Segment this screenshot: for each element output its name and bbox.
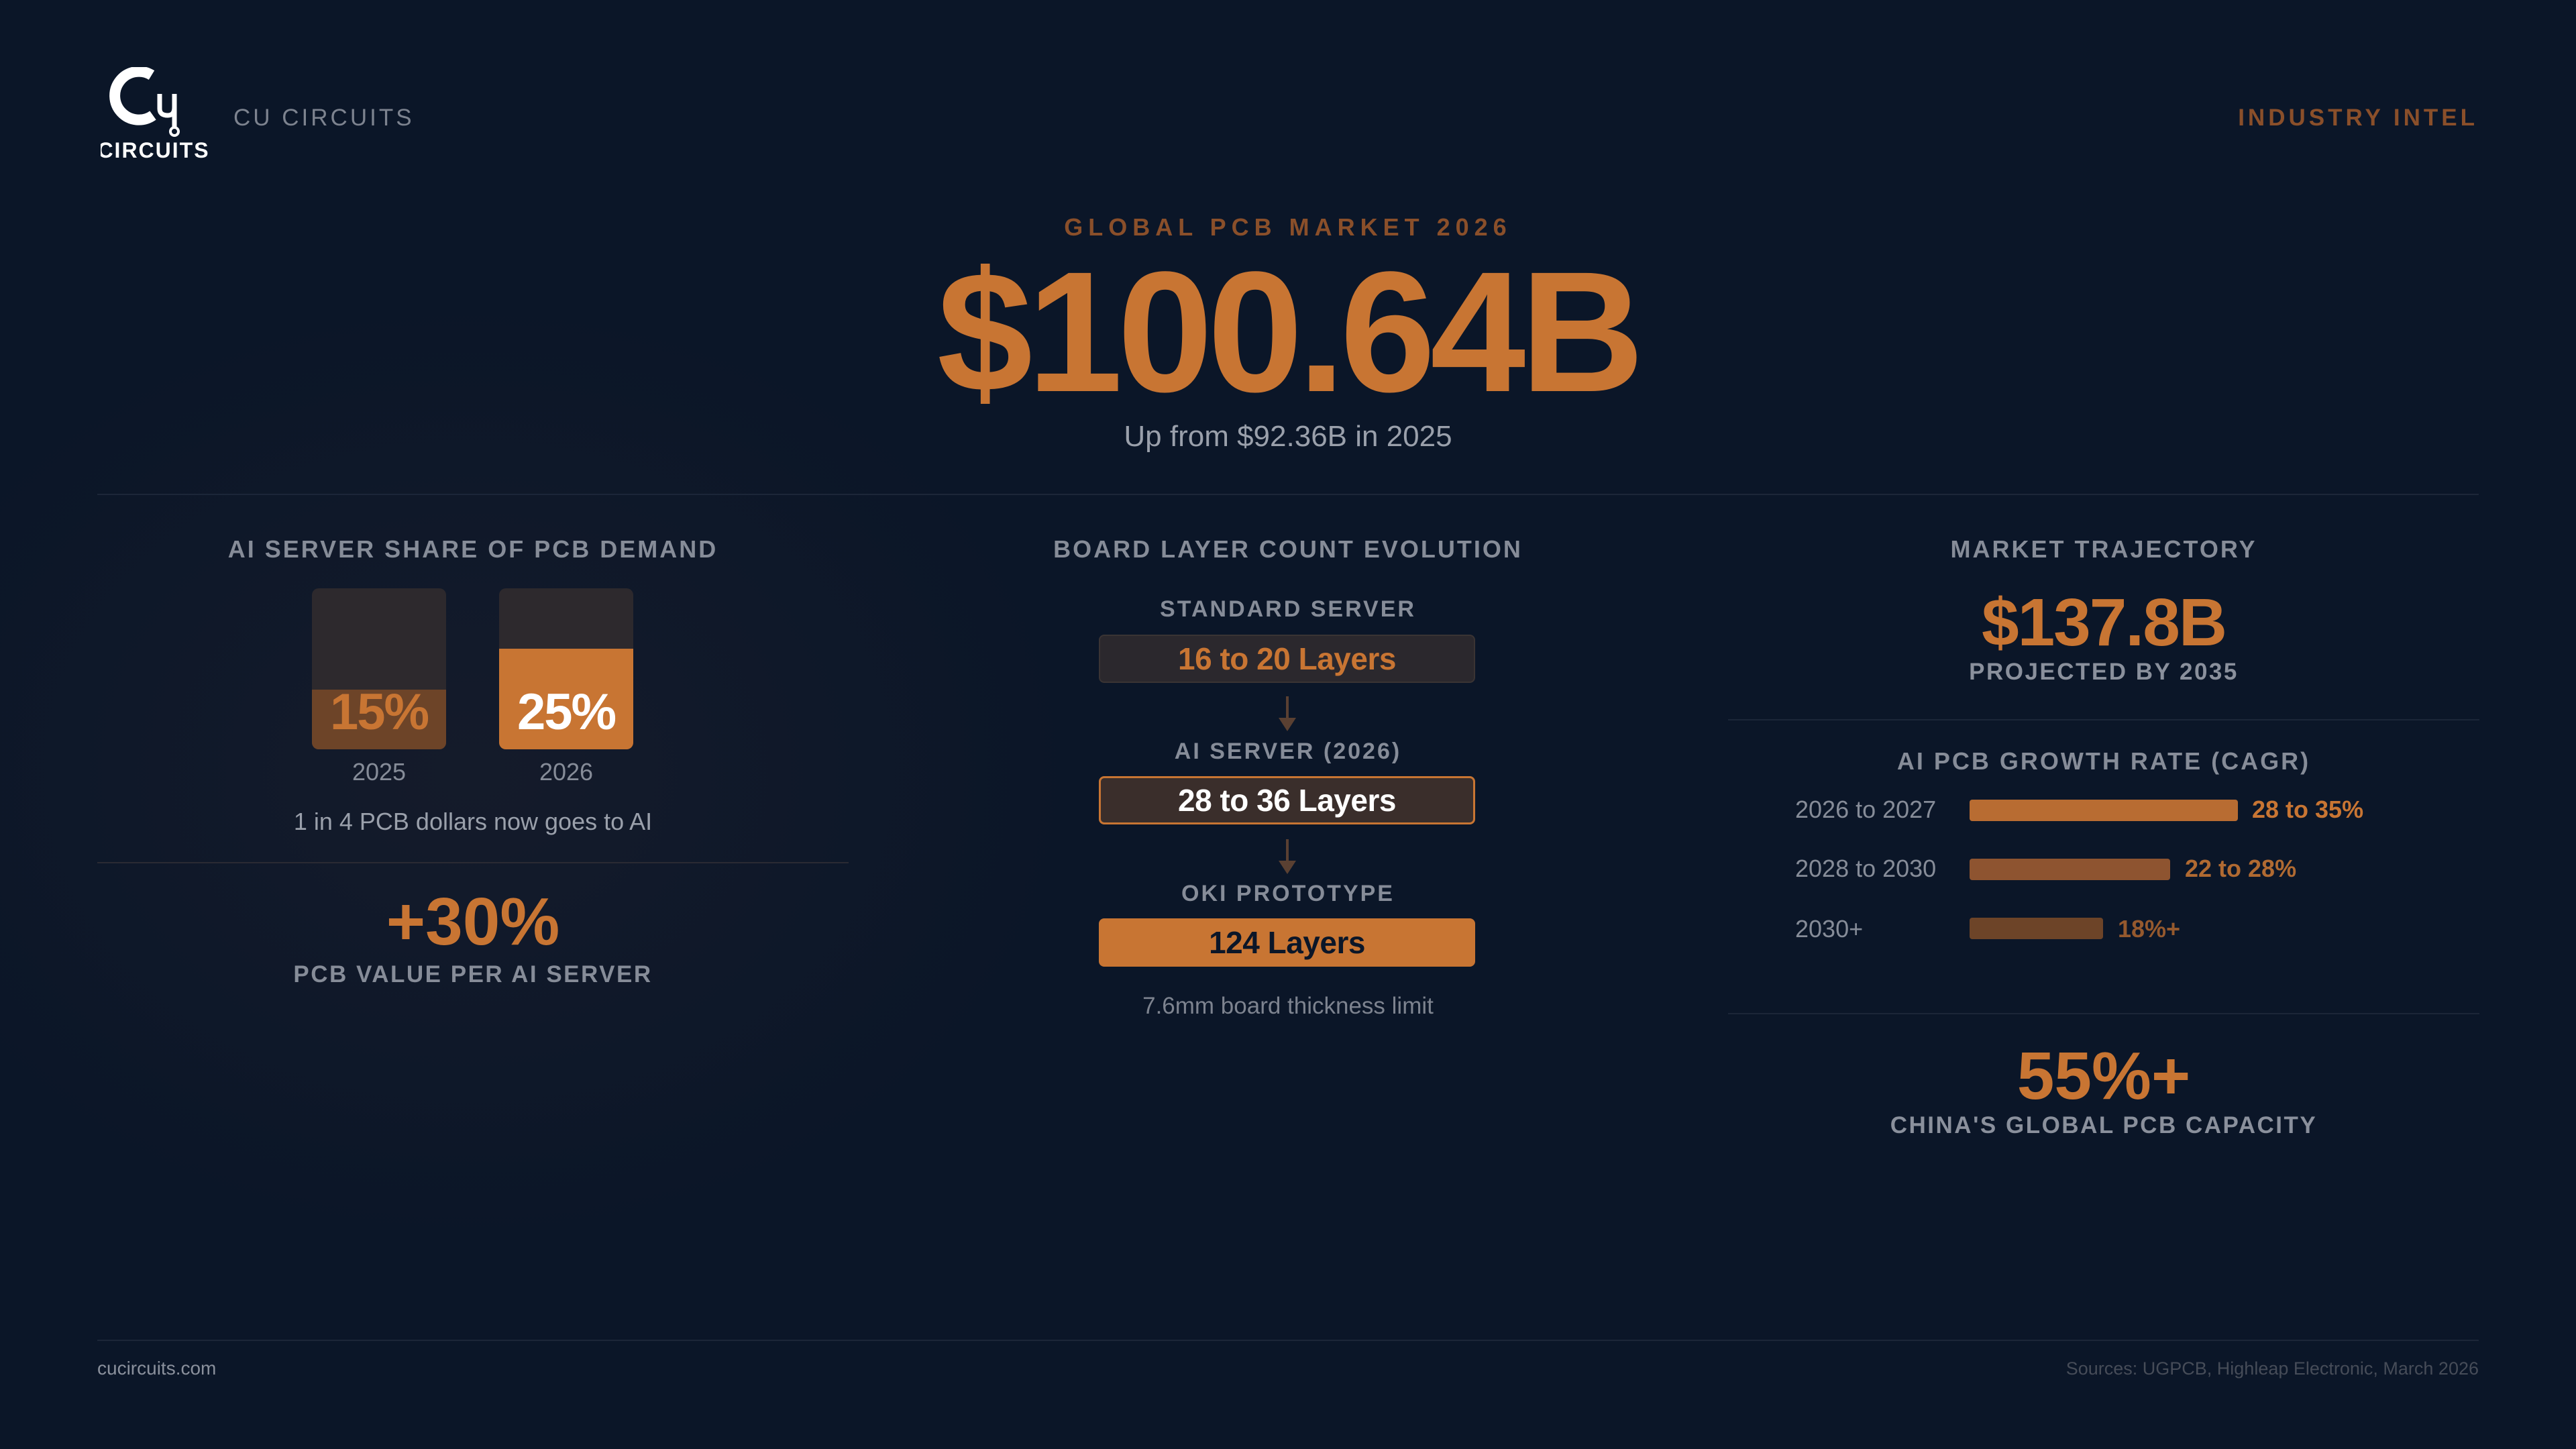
panel: AI server share <box>97 535 849 987</box>
bar chart: 22 to 28% <box>2185 855 2296 882</box>
text: 28 to 36 Layers <box>1178 783 1396 818</box>
panel: AI server share: PCB VALUE PER AI SERVER <box>293 961 653 987</box>
bar chart: 2028 to 2030 <box>1795 855 1936 882</box>
cagr heading: AI PCB GROWTH RATE (CAGR) <box>1897 747 2310 775</box>
panel: layer count: BOARD LAYER COUNT EVOLUTION <box>1053 535 1523 563</box>
caption: 1 in 4 PCB dollars now goes to AI <box>294 808 652 835</box>
arrow 2 <box>1279 839 1296 874</box>
bar 2026 <box>499 588 633 749</box>
stat +30%: +30% <box>386 884 559 959</box>
footer sources: Sources: UGPCB, Highleap Electronic, March 2026 <box>2066 1358 2479 1379</box>
china stat: 55%+ <box>2017 1038 2190 1114</box>
brand name: CU CIRCUITS <box>233 105 415 131</box>
bar chart: 2030+ <box>1795 915 1863 943</box>
bar 2025: 15% <box>330 684 428 741</box>
footer url: cucircuits.com <box>97 1358 216 1379</box>
note: 7.6mm board thickness limit <box>1142 993 1434 1019</box>
text: 16 to 20 Layers <box>1178 641 1396 676</box>
text: 124 Layers <box>1209 925 1365 960</box>
logo <box>101 67 208 161</box>
panel: market trajectory: PROJECTED BY 2035 <box>1969 659 2239 685</box>
arrow 1 <box>1279 696 1296 731</box>
ai server: AI SERVER (2026) <box>1175 739 1401 764</box>
standard server: STANDARD SERVER <box>1160 596 1416 622</box>
bar chart <box>1795 796 2363 943</box>
hero: $100.64B <box>937 236 1639 428</box>
bar chart: 18%+ <box>2118 915 2180 943</box>
bar 2025 <box>312 588 446 749</box>
hero: GLOBAL PCB MARKET 2026 <box>1064 213 1512 241</box>
year labels: 2025 <box>352 758 406 786</box>
heading: AI SERVER SHARE OF PCB DEMAND <box>228 535 718 563</box>
panel: AI server share: 2026 <box>539 758 593 786</box>
projection: $137.8B <box>1982 585 2226 660</box>
panel: market trajectory: CHINA'S GLOBAL PCB CAPACITY <box>1890 1112 2317 1138</box>
industry intel tag: INDUSTRY INTEL <box>2238 105 2478 131</box>
bar chart: 2026 to 2027 <box>1795 796 1936 823</box>
hero: Up from $92.36B in 2025 <box>1124 420 1452 453</box>
bar chart: 28 to 35% <box>2252 796 2363 823</box>
panel: market trajectory <box>1728 535 2479 1138</box>
oki prototype: OKI PROTOTYPE <box>1181 881 1395 906</box>
bar 2026: 25% <box>517 684 615 741</box>
panel: market trajectory: MARKET TRAJECTORY <box>1950 535 2257 563</box>
